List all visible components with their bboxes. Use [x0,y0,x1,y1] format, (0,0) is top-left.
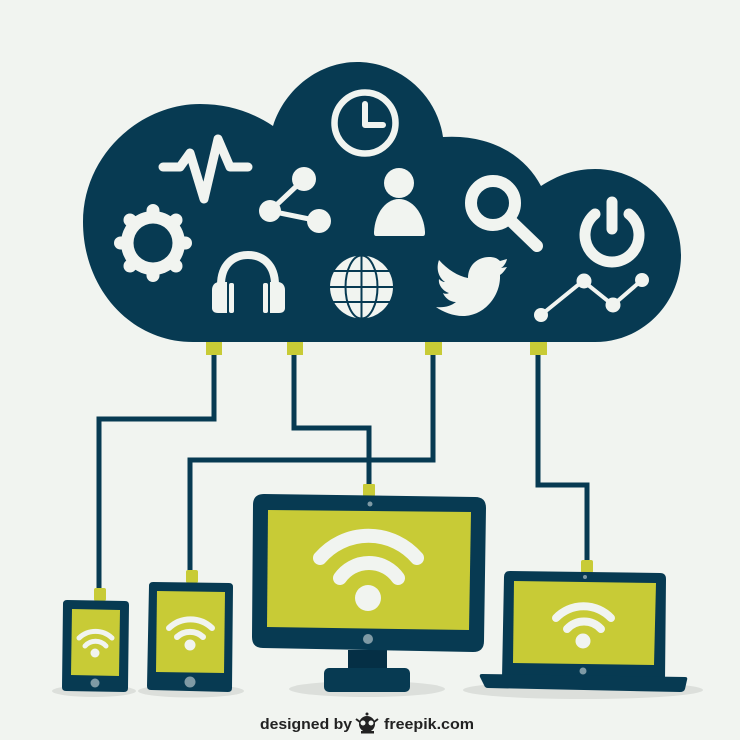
device: monitor [252,494,486,692]
icon: person [374,168,425,236]
credit line [260,712,474,734]
icon: power [585,202,639,262]
yellow connectors [94,341,593,601]
credit line: freepik.com [384,716,474,733]
icon: clock [334,92,396,154]
device: tablet [147,582,233,692]
icon: magnifier [471,181,537,246]
icon: headphones [212,255,285,313]
icon: freepik logo [356,712,378,734]
device: phone [62,600,129,692]
device shadows [52,681,703,699]
connection wires [99,352,587,592]
icon: globe [329,255,394,319]
credit line: designed by [260,716,353,733]
icon: pulse [163,139,248,199]
device: laptop [480,571,687,692]
icon: twitter bird [436,257,507,316]
cloud [83,62,681,342]
icon: line chart [534,273,649,322]
icon: share [259,167,331,233]
icon: gear [120,210,186,276]
